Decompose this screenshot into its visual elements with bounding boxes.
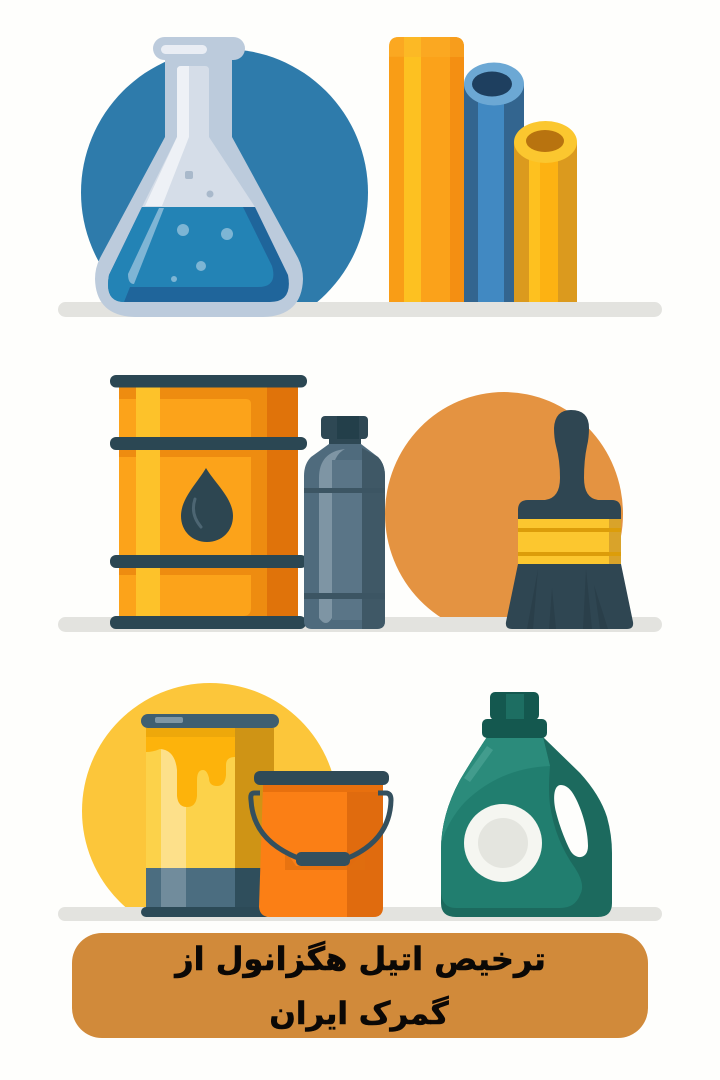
label circle <box>464 804 542 882</box>
blue background circle <box>81 50 368 302</box>
handle cutout <box>554 785 588 857</box>
panel: middle shelf with barrel, bottle and brush <box>58 375 662 636</box>
title text: ترخیص اتیل هگزانول از <box>173 940 546 978</box>
icon: grey bottle <box>304 416 385 629</box>
bottom shelf <box>58 907 662 921</box>
icon: blue tube <box>464 62 524 302</box>
top shelf <box>58 302 662 317</box>
icon: paint brush <box>506 410 633 629</box>
orange background circle <box>385 392 623 636</box>
icon: orange bucket <box>251 771 391 917</box>
icon: green detergent bottle <box>441 692 612 917</box>
icon: laboratory flask <box>95 37 303 317</box>
icon: orange tube <box>389 37 464 302</box>
icon: yellow tube <box>514 121 577 302</box>
title banner <box>72 933 648 1038</box>
icon: paint can <box>141 714 279 917</box>
panel: top shelf with flask and tubes <box>58 37 662 336</box>
icon: oil drop <box>181 468 233 542</box>
middle shelf <box>58 617 662 632</box>
yellow background circle <box>82 683 332 907</box>
panel: bottom shelf with paint can, bucket and detergent bottle <box>58 683 662 939</box>
title text: گمرک ایران <box>269 995 450 1032</box>
infographic canvas <box>58 37 662 1038</box>
icon: oil barrel <box>110 375 307 629</box>
